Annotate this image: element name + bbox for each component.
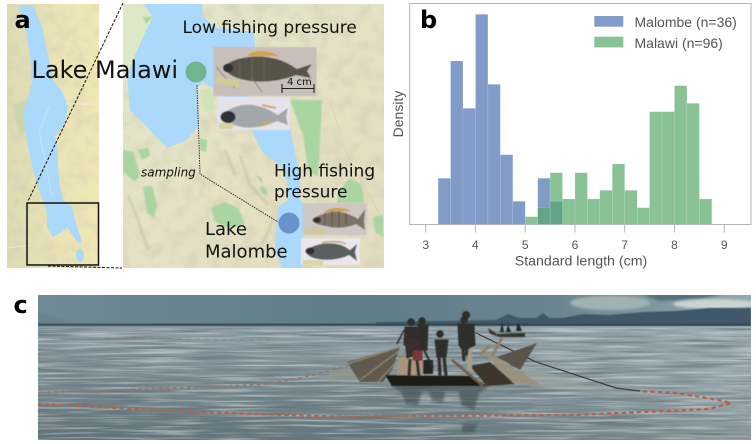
x axis tick labels: 9: [721, 238, 728, 252]
plot frame: [410, 4, 751, 224]
x axis tick labels: 8: [671, 238, 678, 252]
scale bar: 4 cm: [287, 77, 312, 88]
fisherman 2: [418, 318, 433, 368]
forest patches: [123, 17, 383, 237]
Lake Malawi overview: [18, 5, 82, 243]
x axis tick labels: 3: [422, 238, 429, 252]
x axis tick labels: 6: [572, 238, 579, 252]
zoom box: [27, 203, 98, 265]
panel letter c: c: [14, 291, 28, 319]
x axis ticks: [426, 224, 724, 232]
Malombe bars: [438, 14, 562, 224]
head rope: [476, 333, 640, 391]
net floats: front line: [38, 391, 731, 417]
relief texture: [128, 150, 272, 250]
translucent net: [522, 366, 604, 390]
Lake Malombe overview: [76, 248, 84, 262]
far net floats: [105, 338, 270, 340]
fishermen: [397, 312, 475, 377]
Lake Malombe detail and river arm: [250, 128, 305, 268]
fisherman 5: [458, 312, 475, 361]
overview map: [7, 4, 99, 268]
x axis tick labels: 4: [472, 238, 479, 252]
fisherman 1: [397, 319, 419, 345]
label: High fishing pressure: High fishing: [274, 162, 375, 182]
fisherman 4: [435, 331, 448, 376]
label: Lake Malombe: Malombe: [205, 242, 288, 263]
x axis tick labels: 7: [621, 238, 628, 252]
label: Low fishing pressure: Low fishing pressure: [182, 18, 357, 38]
marker: Lake Malombe: [278, 212, 300, 234]
fish photo 3: [303, 203, 367, 235]
sampling route line: [197, 85, 278, 222]
legend: [594, 14, 737, 51]
label: sampling: sampling: [141, 166, 196, 180]
fish photo 2: [217, 97, 290, 130]
sky and water: [38, 294, 756, 440]
panel a: map: [7, 3, 384, 268]
zoom connector lines: [28, 3, 123, 268]
net floats: back line: [41, 366, 347, 392]
label: Lake Malombe: Lake: [205, 219, 247, 240]
x axis tick labels: 5: [522, 238, 529, 252]
marker: Lake Malawi: [186, 62, 206, 82]
fish photo 1: [214, 47, 316, 96]
x axis tick labels: [422, 238, 728, 252]
panel c: photo of fishermen: [38, 294, 756, 440]
legend: Malombe (n=36): [634, 14, 737, 30]
x axis title: Standard length (cm): [515, 254, 647, 270]
far boat: [488, 322, 525, 337]
scale bar: [282, 77, 314, 93]
panel b: histogram: [390, 4, 751, 270]
distant hills: [38, 308, 751, 326]
main boat: [347, 338, 543, 386]
reflections: [390, 385, 490, 432]
Lake Malawi detail: [127, 4, 256, 148]
panel letter b: b: [420, 6, 437, 34]
legend: Malawi (n=96): [634, 35, 723, 51]
label: High fishing pressure: pressure: [274, 183, 347, 203]
y axis title: Density: [390, 91, 406, 137]
label: Lake Malawi: Lake Malawi: [32, 56, 178, 84]
panel letter a: a: [14, 6, 31, 34]
fisherman 3: [405, 331, 422, 377]
fish photo 4: [301, 238, 360, 265]
Malawi bars: [525, 86, 712, 224]
detail map: [123, 4, 384, 268]
